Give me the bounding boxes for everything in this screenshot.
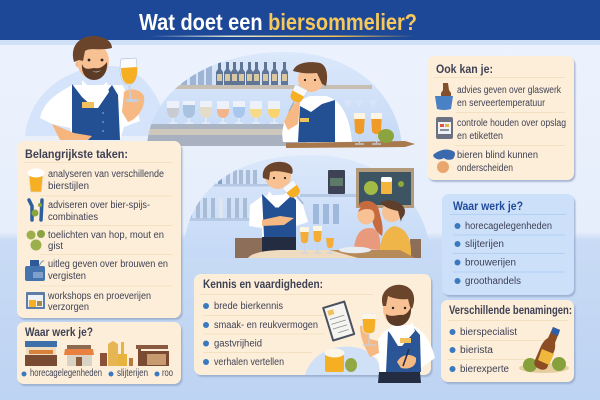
heading: Belangrijkste taken:: [25, 149, 128, 161]
werkplekken: slijterijen: [117, 368, 148, 379]
beer glasses and hop: [354, 113, 394, 144]
sommelier: [249, 194, 308, 240]
header band: [0, 0, 600, 45]
panel: kennis en vaardigheden: [194, 274, 435, 383]
bar man: [282, 96, 352, 142]
task: bierstijlen: bierstijlen: [48, 181, 89, 192]
list: gastvrijheid: [214, 338, 262, 350]
advice on glassware: [435, 83, 562, 110]
icon: brewery tanks: [100, 341, 133, 366]
panel: verschillende benamingen: [441, 300, 574, 382]
backdrop arc behind sommelier: [25, 66, 170, 136]
list: brede bierkennis: [214, 301, 283, 312]
list: bierexperte: [460, 364, 509, 375]
task: brouwen: uitleg geven over brouwen en: [48, 259, 168, 270]
storage check: controle houden over opslag: [457, 118, 566, 129]
heading: Waar werk je?: [25, 327, 93, 339]
heading: Waar werk je?: [453, 201, 523, 213]
scene: sommelier at the bar: [147, 52, 415, 148]
werkplekken: [22, 368, 173, 379]
heading: Ook kan je:: [436, 64, 493, 76]
list: groothandels: [465, 276, 521, 287]
list: smaak- en reukvermogen: [214, 320, 318, 331]
task: hop, mout, gist: toelichten van hop, mout en: [48, 230, 164, 241]
shelf glasses: [167, 100, 378, 123]
task: brouwen: [25, 259, 168, 282]
backdrop arc: [305, 347, 385, 375]
man guest: [380, 226, 411, 258]
blind tasting: onderscheiden: [457, 163, 513, 174]
raised glass: [283, 84, 308, 115]
list: brouwerijen: [465, 258, 516, 268]
list: verhalen vertellen: [214, 357, 284, 368]
storage check: en etiketten: [457, 131, 503, 142]
list: slijterijen: [465, 239, 504, 250]
woman guest: [354, 228, 380, 250]
task: bier-spijs: combinaties: [48, 212, 98, 223]
panel: belangrijkste taken: [17, 141, 181, 318]
icon: warehouse: [136, 345, 169, 366]
task: hop, mout, gist: [26, 230, 164, 252]
icon: shop: [64, 345, 94, 366]
shelf bottles: [181, 66, 212, 85]
shelf rows: [212, 184, 270, 186]
task: hop, mout, gist: gist: [48, 241, 63, 252]
blind tasting: bieren blind kunnen: [457, 150, 538, 161]
scene: sommelier serving guests: [183, 155, 433, 258]
storage check: [436, 117, 566, 142]
task: workshops: verzorgen: [48, 302, 89, 313]
heading: Verschillende benamingen:: [449, 305, 572, 317]
blind tasting: [433, 150, 538, 174]
werkplekken: roo: [162, 368, 173, 379]
list: bierista: [460, 345, 493, 356]
task: brouwen: vergisten: [48, 271, 86, 282]
list: bierspecialist: [460, 327, 517, 338]
icon: bottle with hops: [519, 327, 569, 373]
task: bierstijlen: [28, 168, 164, 192]
task: bier-spijs: adviseren over bier-spijs-: [48, 200, 150, 211]
panel: waar werk je (links): [17, 322, 181, 384]
list: [454, 221, 552, 287]
task: workshops: [26, 291, 151, 313]
tasting glass at nose: [282, 180, 309, 208]
chairs: [235, 238, 265, 258]
panel: ook kan je: [427, 56, 574, 180]
task: bierstijlen: analyseren van verschillende: [48, 169, 164, 180]
list: horecagelegenheden: [465, 221, 552, 232]
illustration: sommelier with notes: [360, 285, 435, 383]
chalkboard with beer: [356, 168, 414, 208]
menu board: [328, 170, 345, 194]
werkplekken: horecagelegenheden: [30, 368, 102, 379]
table: [248, 250, 415, 258]
list: [450, 327, 517, 375]
heading: Kennis en vaardigheden:: [203, 279, 323, 291]
tasting glasses: [300, 227, 309, 243]
task: bier-spijs: [29, 200, 150, 223]
list: [203, 301, 318, 368]
title: Wat doet een biersommelier?: [139, 9, 417, 35]
panel: waar werk je (rechts): [442, 194, 574, 295]
icon: bar counter: [25, 341, 57, 366]
icon: beer and hop: [324, 348, 357, 372]
task: workshops: workshops en proeverijen: [47, 291, 151, 302]
advice on glassware: advies geven over glaswerk: [457, 85, 562, 96]
illustration: sommelier with beer glass: [40, 36, 144, 140]
advice on glassware: en serveertemperatuur: [457, 98, 546, 109]
counter: [286, 141, 415, 148]
icon: clipboard: [322, 300, 355, 342]
